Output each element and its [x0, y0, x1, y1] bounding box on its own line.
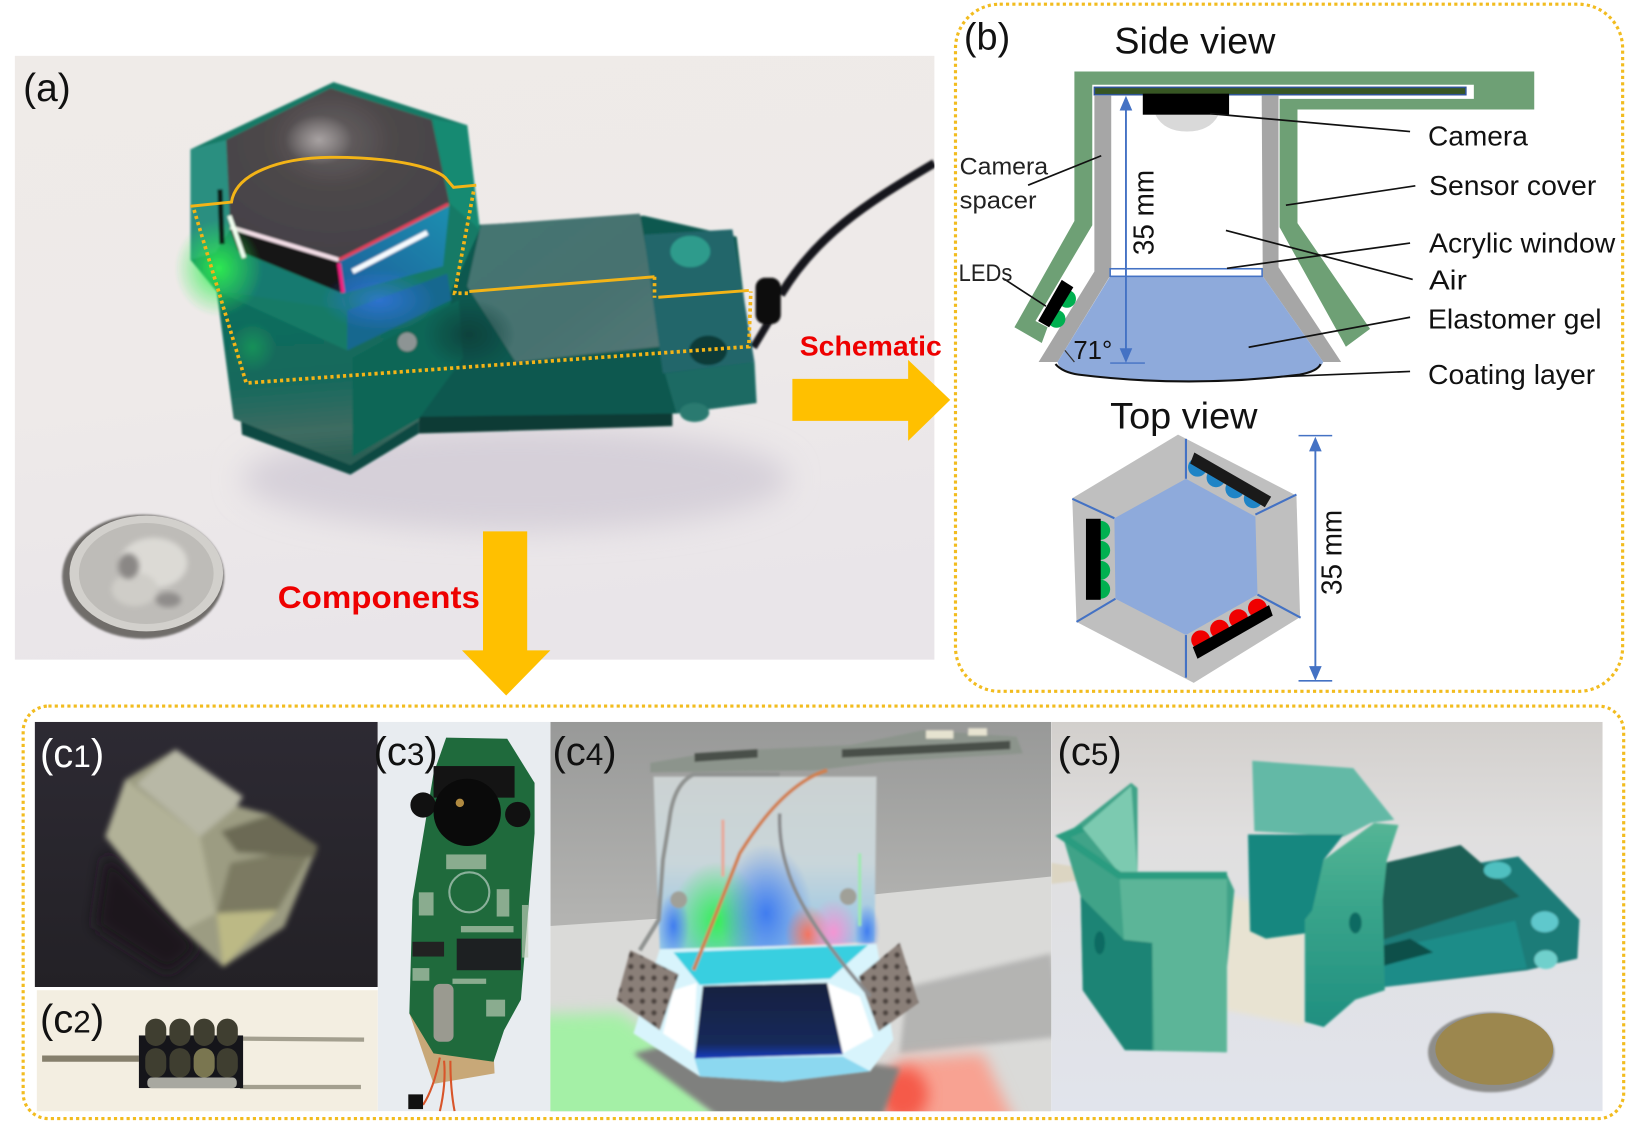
yellow outline on sensor [190, 157, 751, 383]
label a: (a) [23, 67, 71, 110]
label c2: (c2) [40, 997, 104, 1041]
panel b border [955, 4, 1623, 691]
width dimension: 35 mm [1317, 510, 1349, 595]
blue LEDs [1188, 452, 1271, 508]
label coating layer: Coating layer [1428, 359, 1595, 390]
top view heading: Top view [1110, 395, 1258, 436]
camera spacer right [1262, 96, 1341, 362]
panel c: components [23, 706, 1624, 1123]
label LEDs: LEDs [959, 260, 1012, 287]
acrylic window [1110, 269, 1262, 276]
label camera spacer: Camera [960, 154, 1049, 181]
arrow: to components [462, 531, 550, 696]
label: Schematic: Schematic [800, 331, 942, 362]
side view diagram [959, 72, 1616, 390]
hexagon spokes [1072, 439, 1301, 678]
coin [62, 515, 224, 639]
red LEDs [1191, 599, 1273, 659]
arrow: to schematic [792, 360, 950, 441]
top view diagram [1072, 435, 1349, 683]
angle mark [1065, 350, 1074, 362]
coin in c5 [1428, 1012, 1554, 1092]
label acrylic window: Acrylic window [1429, 228, 1616, 259]
label c3: (c3) [374, 730, 438, 774]
label: Components: Components [278, 579, 480, 615]
label air: Air [1429, 264, 1467, 295]
leader lines [1004, 114, 1415, 377]
photo c4: assembled sensor with LEDs [550, 722, 1052, 1112]
circuit board [1094, 87, 1466, 95]
sensor device photo [175, 82, 934, 475]
height arrow [1110, 96, 1145, 363]
elastomer gel [1058, 276, 1323, 381]
inner gel hexagon [1114, 479, 1257, 635]
label sensor cover: Sensor cover [1429, 170, 1596, 201]
photo c2: LED strip [37, 990, 378, 1111]
label b: (b) [964, 16, 1010, 58]
label c4: (c4) [552, 730, 617, 774]
photo c1: spacer part [35, 722, 378, 987]
label c1: (c1) [40, 732, 104, 776]
side LEDs [1038, 280, 1076, 328]
camera body [1143, 94, 1229, 115]
label c5: (c5) [1058, 730, 1122, 774]
label camera spacer: spacer [960, 187, 1037, 214]
panel c border [23, 706, 1624, 1119]
width arrow [1299, 436, 1332, 681]
sensor cover [1014, 72, 1534, 347]
photo c5: sensor cover parts [1051, 722, 1603, 1111]
angle label: 71° [1073, 335, 1112, 365]
camera spacer [1039, 96, 1111, 362]
outer hexagon [1072, 435, 1300, 683]
coating layer [1055, 364, 1321, 381]
label camera: Camera [1428, 121, 1529, 152]
label elastomer gel: Elastomer gel [1428, 303, 1602, 334]
panel a: photograph of sensor [15, 56, 934, 660]
photo background [15, 56, 934, 660]
camera lens [1155, 115, 1219, 132]
coin face in c5 [1435, 1013, 1553, 1085]
panel b: schematic [955, 4, 1623, 691]
height dimension: 35 mm [1128, 170, 1160, 255]
green LEDs [1086, 519, 1110, 600]
sensor shadow [242, 426, 789, 531]
photo c3: camera board [378, 722, 550, 1111]
side view heading: Side view [1114, 21, 1276, 62]
